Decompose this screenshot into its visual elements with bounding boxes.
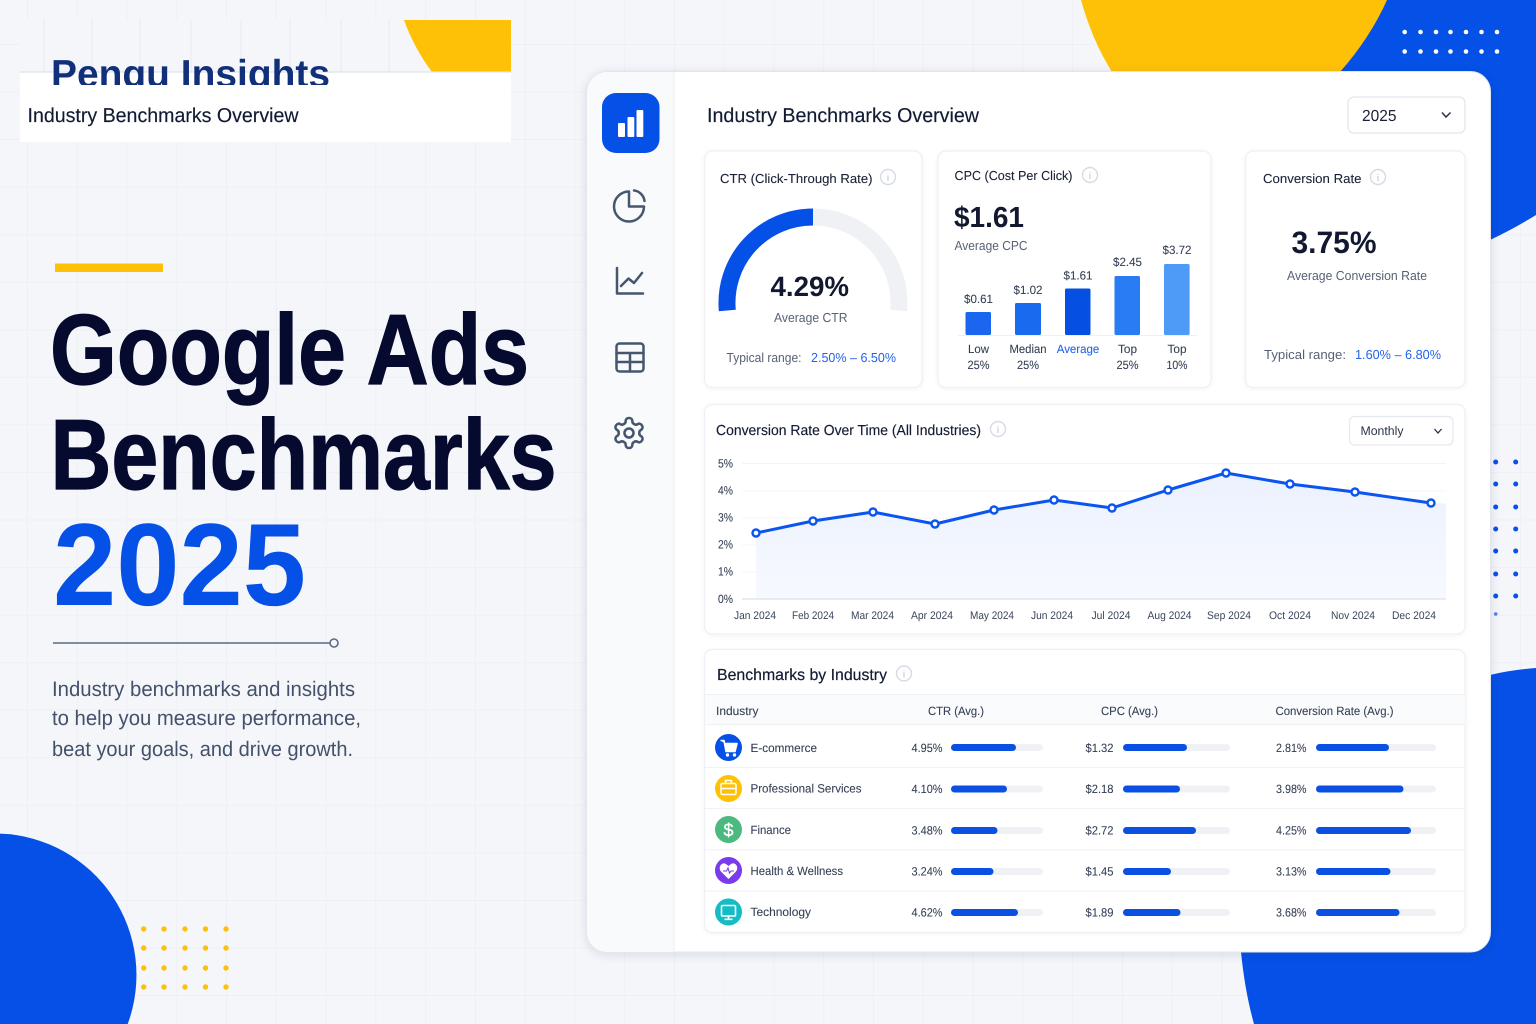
main title: 2025 bbox=[53, 499, 306, 630]
info icon bbox=[896, 666, 912, 681]
CPC bar chart: Top bbox=[1118, 342, 1137, 356]
CPC title: CPC (Cost Per Click) bbox=[954, 168, 1072, 183]
icon: active bar chart bbox=[602, 93, 660, 153]
conversion typical range: Typical range: bbox=[1264, 347, 1346, 362]
info icon: i bbox=[1089, 171, 1091, 182]
brand name clipped: Pengu Insights bbox=[51, 53, 330, 96]
yellow corner shape bbox=[404, 20, 511, 72]
row: professional services: 4.10% bbox=[912, 782, 943, 796]
description text: Industry benchmarks and insights bbox=[52, 678, 355, 701]
CPC bar chart bbox=[958, 243, 1197, 372]
banner subtitle: Industry Benchmarks Overview bbox=[28, 105, 299, 127]
decorative blue shape top right bbox=[1300, 0, 1536, 240]
yellow accent bar bbox=[55, 264, 163, 272]
CTR typical range: Typical range: bbox=[726, 350, 802, 365]
line chart: 3% bbox=[718, 510, 733, 524]
year dropdown: 2025 bbox=[1362, 108, 1397, 125]
line chart: Oct 2024 bbox=[1269, 610, 1311, 622]
row: professional services: Professional Services bbox=[750, 782, 862, 796]
icon: monitor bbox=[715, 898, 742, 926]
row: finance: $2.72 bbox=[1086, 824, 1114, 838]
year dropdown bbox=[1348, 97, 1465, 133]
table title: Benchmarks by Industry bbox=[717, 667, 887, 684]
row: e-commerce: E-commerce bbox=[750, 741, 817, 755]
info icon: i bbox=[1377, 173, 1379, 184]
row: e-commerce: 2.81% bbox=[1276, 741, 1307, 755]
icon: dollar sign: $ bbox=[723, 820, 734, 840]
CPC bar chart: $1.61 bbox=[1064, 268, 1093, 282]
decorative blue dot grid right bbox=[1493, 460, 1518, 616]
info icon bbox=[880, 170, 896, 184]
conversion typical range bbox=[1264, 347, 1441, 362]
line chart: Jun 2024 bbox=[1031, 610, 1073, 622]
line chart: 0% bbox=[718, 592, 733, 606]
icon: table bbox=[616, 344, 644, 372]
line chart: Aug 2024 bbox=[1148, 610, 1192, 622]
panel: conversion rate over time bbox=[704, 404, 1465, 634]
row: e-commerce bbox=[715, 734, 1436, 761]
line chart: May 2024 bbox=[970, 610, 1014, 622]
line chart: Nov 2024 bbox=[1331, 610, 1375, 622]
row: e-commerce: $1.32 bbox=[1086, 741, 1114, 755]
icon: heart bbox=[715, 857, 742, 884]
CTR caption: Average CTR bbox=[774, 310, 848, 325]
line chart: 5% bbox=[718, 456, 733, 470]
monthly dropdown: Monthly bbox=[1360, 424, 1404, 438]
table header row: CPC (Avg.) bbox=[1101, 704, 1158, 718]
CPC bar chart: 25% bbox=[1116, 358, 1139, 372]
row: technology: 3.68% bbox=[1276, 906, 1307, 920]
line chart: Jan 2024 bbox=[734, 610, 776, 622]
dashboard panel bbox=[587, 72, 1490, 952]
table header row: CTR (Avg.) bbox=[928, 704, 984, 718]
divider with end dot bbox=[53, 639, 338, 647]
main title: Benchmarks bbox=[50, 399, 556, 511]
line chart: 2% bbox=[718, 538, 733, 552]
panel: CPC bbox=[938, 151, 1211, 388]
info icon: i bbox=[997, 425, 999, 436]
conversion typical range: 1.60% – 6.80% bbox=[1355, 347, 1441, 362]
decorative blue shape bottom right bbox=[1241, 668, 1536, 1024]
table header row bbox=[705, 694, 1465, 724]
CPC bar chart: $1.02 bbox=[1014, 283, 1043, 297]
row: technology bbox=[715, 898, 1436, 926]
CPC bar chart: Median bbox=[1010, 342, 1046, 356]
line chart: 4% bbox=[718, 484, 733, 498]
line chart: Sep 2024 bbox=[1207, 610, 1251, 622]
CPC bar chart: 10% bbox=[1166, 358, 1188, 372]
info icon bbox=[990, 422, 1006, 436]
CPC value: $1.61 bbox=[954, 202, 1024, 234]
CTR value: 4.29% bbox=[770, 271, 849, 302]
row: finance: 3.48% bbox=[912, 824, 943, 838]
icon: dollar sign bbox=[715, 816, 742, 843]
CPC bar chart: 25% bbox=[1017, 358, 1039, 372]
row: technology: 4.62% bbox=[912, 906, 943, 920]
sidebar bbox=[587, 72, 674, 952]
gauge bbox=[727, 217, 899, 310]
CPC bar chart: $0.61 bbox=[964, 292, 993, 306]
line chart: Dec 2024 bbox=[1392, 610, 1436, 622]
main title bbox=[50, 294, 556, 630]
panel: conversion rate bbox=[1246, 151, 1465, 388]
row: professional services bbox=[715, 775, 1436, 802]
line chart: Jul 2024 bbox=[1092, 610, 1130, 622]
CPC bar chart: Average bbox=[1057, 342, 1100, 356]
conversion caption: Average Conversion Rate bbox=[1287, 268, 1427, 283]
monthly dropdown bbox=[1350, 416, 1453, 445]
row: health and wellness: $1.45 bbox=[1086, 864, 1114, 878]
row: finance bbox=[715, 816, 1436, 843]
row: finance: 4.25% bbox=[1276, 824, 1307, 838]
line chart: Feb 2024 bbox=[792, 610, 834, 622]
row: health and wellness: 3.24% bbox=[912, 864, 943, 878]
icon: briefcase bbox=[715, 775, 742, 802]
row: finance: Finance bbox=[750, 823, 791, 837]
CPC bar chart: 25% bbox=[968, 358, 990, 372]
CPC bar chart: $2.45 bbox=[1113, 255, 1142, 269]
info icon: i bbox=[903, 670, 905, 680]
row: health and wellness: Health & Wellness bbox=[750, 864, 843, 878]
dashboard heading: Industry Benchmarks Overview bbox=[707, 105, 980, 127]
description text bbox=[52, 678, 361, 761]
info icon bbox=[1370, 170, 1386, 184]
row: professional services: 3.98% bbox=[1276, 782, 1307, 796]
icon: settings gear bbox=[615, 418, 643, 448]
header banner bbox=[20, 20, 511, 142]
decorative white dots top right bbox=[1402, 30, 1499, 54]
info icon bbox=[1082, 168, 1098, 182]
decorative blue shape bottom left bbox=[0, 834, 136, 1024]
info icon: i bbox=[887, 173, 889, 184]
decorative yellow shape top bbox=[1081, 0, 1387, 72]
CPC bar chart: Top bbox=[1168, 342, 1187, 356]
row: health and wellness: 3.13% bbox=[1276, 864, 1307, 878]
row: professional services: $2.18 bbox=[1086, 782, 1114, 796]
CTR typical range: 2.50% – 6.50% bbox=[811, 350, 896, 365]
icon: shopping cart bbox=[715, 734, 742, 761]
CTR typical range bbox=[726, 350, 896, 365]
table header row: Conversion Rate (Avg.) bbox=[1276, 704, 1394, 718]
icon: pie chart bbox=[614, 190, 644, 222]
row: technology: Technology bbox=[750, 905, 811, 919]
row: technology: $1.89 bbox=[1086, 906, 1114, 920]
line chart bbox=[718, 456, 1446, 622]
CPC bar chart: $3.72 bbox=[1162, 243, 1192, 257]
description text: beat your goals, and drive growth. bbox=[52, 738, 353, 761]
panel: benchmarks by industry bbox=[704, 650, 1465, 932]
conversion value: 3.75% bbox=[1292, 225, 1376, 260]
row: e-commerce: 4.95% bbox=[912, 741, 943, 755]
chart title: Conversion Rate Over Time (All Industries) bbox=[716, 423, 981, 439]
row: health and wellness bbox=[715, 857, 1436, 884]
CPC bar chart: Low bbox=[968, 342, 989, 356]
panel: CTR bbox=[704, 151, 922, 388]
line chart: 1% bbox=[718, 564, 733, 578]
conversion title: Conversion Rate bbox=[1263, 171, 1362, 186]
description text: to help you measure performance, bbox=[52, 707, 361, 730]
icon: line chart bbox=[617, 268, 643, 294]
table header row: Industry bbox=[716, 704, 758, 718]
line chart: Apr 2024 bbox=[911, 610, 953, 622]
decorative yellow dot grid bbox=[141, 926, 229, 990]
CTR title: CTR (Click-Through Rate) bbox=[720, 171, 872, 186]
main title: Google Ads bbox=[50, 294, 529, 406]
CPC caption: Average CPC bbox=[954, 238, 1028, 253]
line chart: Mar 2024 bbox=[851, 610, 894, 622]
